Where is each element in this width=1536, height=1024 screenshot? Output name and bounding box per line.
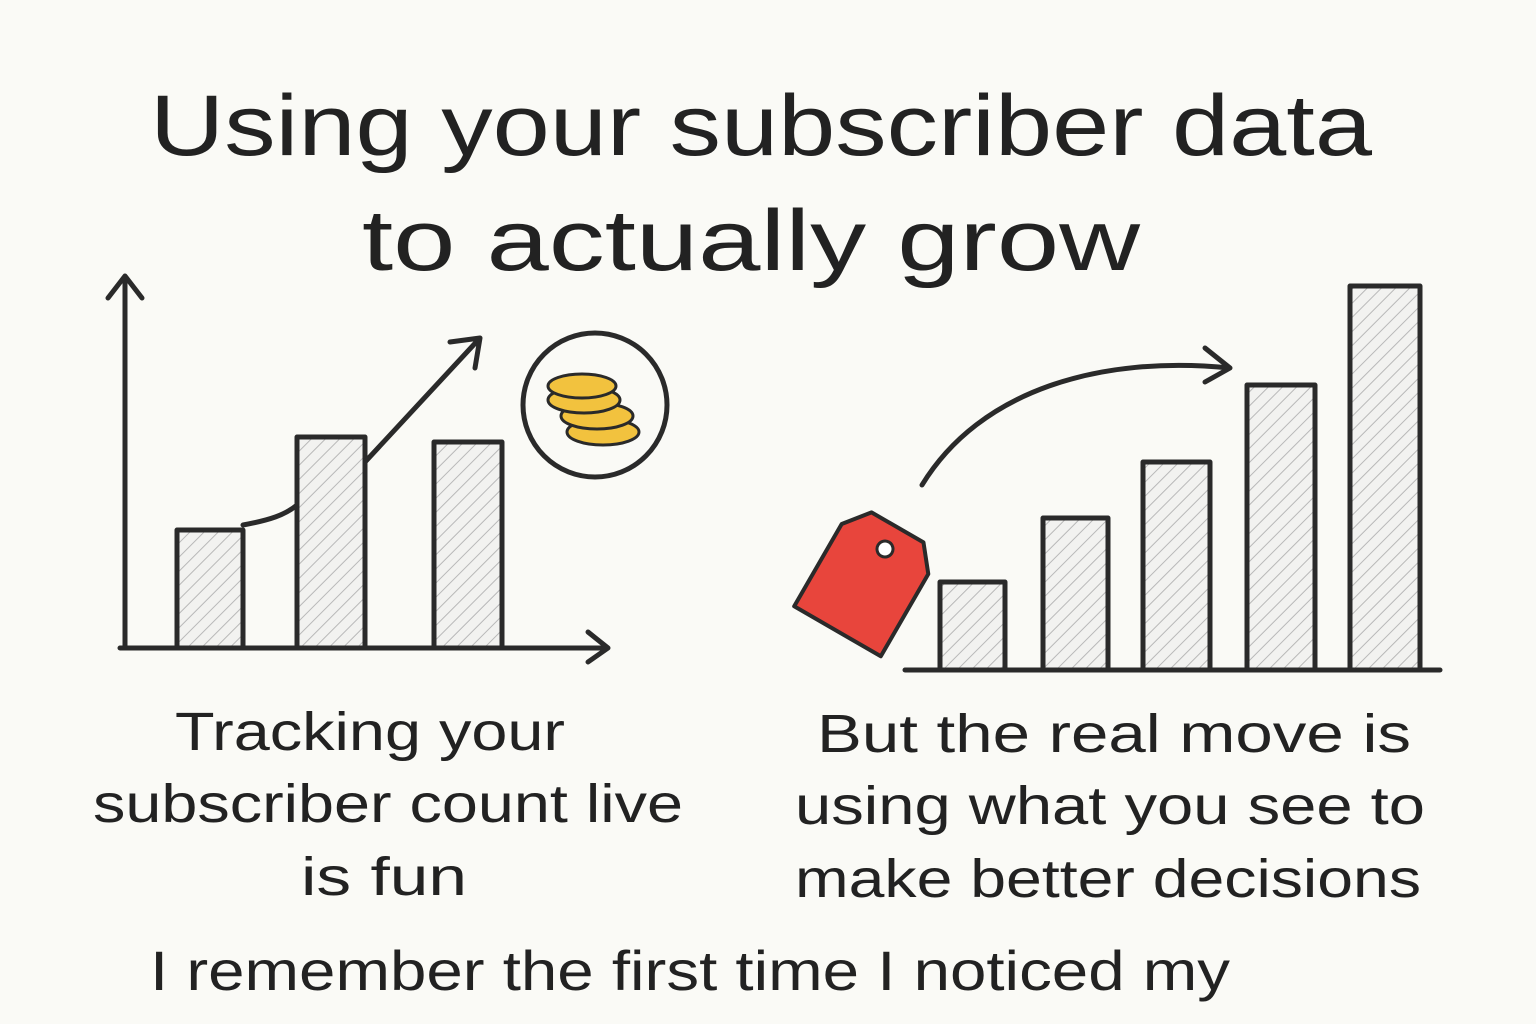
caption: right: make better decisions: [795, 849, 1421, 909]
arrow: curve: [922, 348, 1230, 485]
caption: right: using what you see to: [795, 776, 1425, 836]
caption: left: [93, 702, 683, 907]
title: to actually grow: [362, 193, 1141, 289]
bars: [177, 437, 502, 648]
arrow: growth: [243, 338, 480, 525]
title: Using your subscriber data: [150, 78, 1372, 174]
bars: [940, 286, 1420, 670]
caption: left: Tracking your: [175, 702, 565, 762]
bottom text: I remember the first time I noticed my: [150, 939, 1230, 1002]
title: [150, 78, 1372, 289]
icon: red tag: [794, 502, 941, 656]
caption: right: [795, 704, 1425, 909]
left chart: [108, 276, 608, 662]
right chart: [905, 286, 1440, 670]
icon: coins: [523, 333, 667, 477]
caption: right: But the real move is: [817, 704, 1411, 764]
caption: left: subscriber count live: [93, 774, 683, 834]
caption: left: is fun: [301, 847, 467, 907]
